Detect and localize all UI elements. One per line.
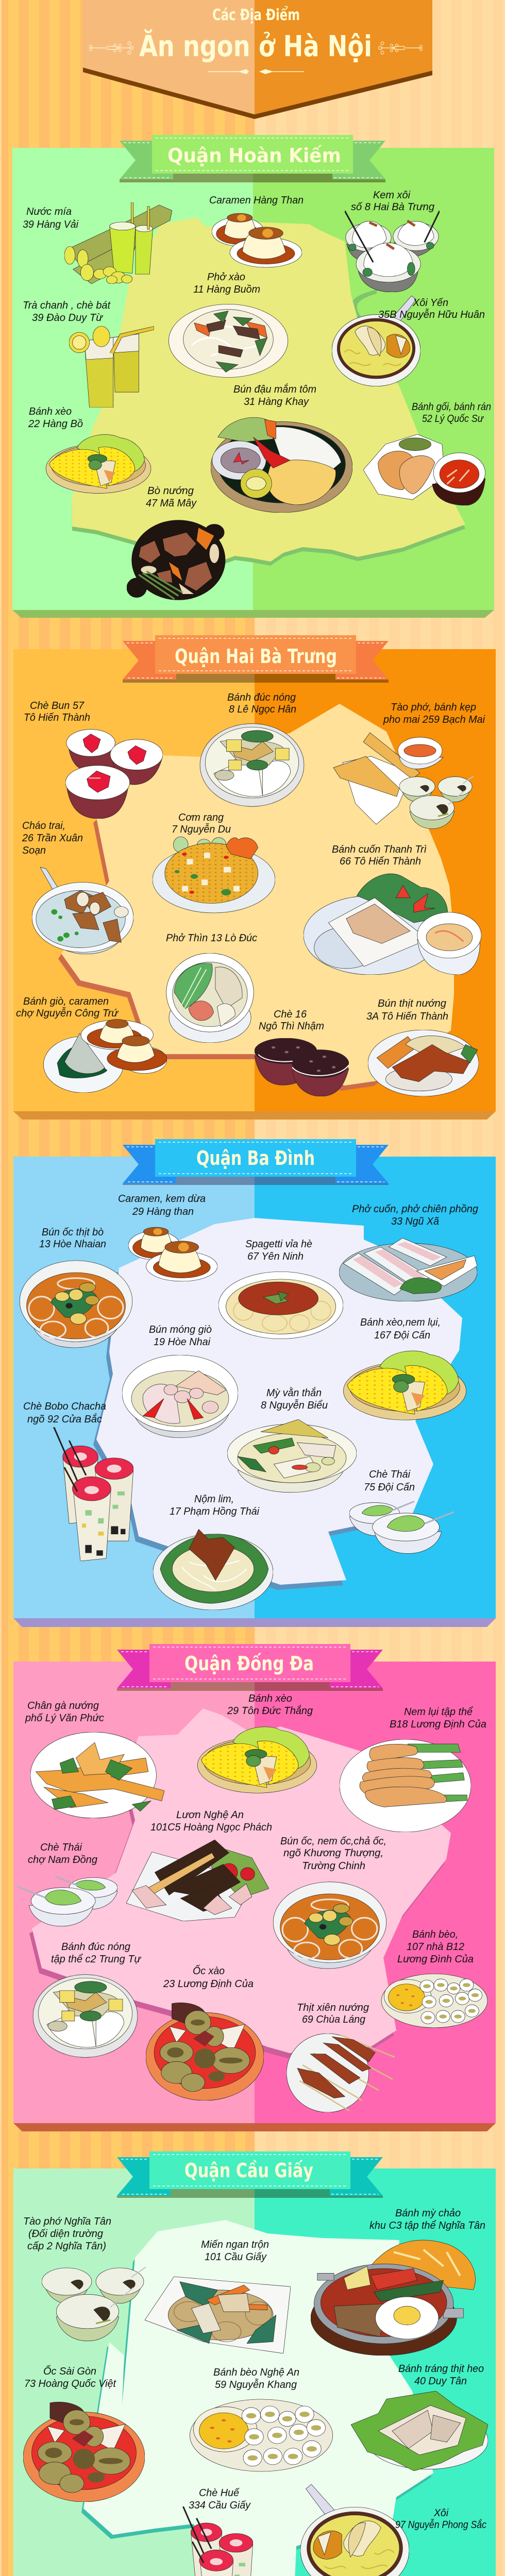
labels: Cầu Giấy: Xôi <box>433 2507 449 2519</box>
dish: nem lụi <box>340 1739 471 1832</box>
dish: xôi yến <box>332 296 420 386</box>
dish: bánh giò, caramen <box>43 1019 167 1093</box>
header banner: Ăn ngon ở Hà Nội <box>139 29 372 63</box>
labels: Ba Đình: 8 Nguyễn Biểu <box>261 1399 328 1411</box>
labels: Hai Bà Trưng: Tào phớ, bánh kẹp <box>391 702 476 713</box>
dish: bún đậu <box>211 417 352 513</box>
dish: bún ốc <box>273 1882 386 1969</box>
labels: Hai Bà Trưng: chợ Nguyễn Công Trứ <box>16 1007 119 1019</box>
labels: Đống Đa: chợ Nam Đồng <box>28 1854 97 1866</box>
header banner <box>83 0 432 119</box>
labels: Đống Đa: Thịt xiên nướng <box>297 2002 369 2013</box>
labels: Ba Đình: Spagetti vỉa hè <box>245 1239 312 1250</box>
labels: Cầu Giấy: 334 Cầu Giấy <box>189 2500 251 2511</box>
labels: Đống Đa: phố Lý Văn Phức <box>25 1713 104 1724</box>
labels: Ba Đình: Chè Bobo Chacha <box>23 1401 106 1412</box>
dish: chè bun <box>65 730 163 819</box>
labels: Hoàn Kiếm <box>23 190 491 509</box>
labels: Hoàn Kiếm: 31 Hàng Khay <box>244 396 309 408</box>
ribbon: Quận Hai Bà Trưng <box>123 635 389 683</box>
dish: bánh bèo <box>381 1974 487 2028</box>
labels: Hai Bà Trưng: 3A Tô Hiến Thành <box>366 1011 448 1022</box>
labels: Đống Đa: 107 nhà B12 <box>407 1941 464 1953</box>
labels: Hai Bà Trưng: Bánh cuốn Thanh Trì <box>332 844 427 855</box>
labels: Đống Đa: Ốc xào <box>193 1964 225 1977</box>
labels: Đống Đa: Lươn Nghệ An <box>176 1809 244 1821</box>
labels: Đống Đa: ngõ Khương Thượng, <box>283 1848 383 1859</box>
dish: chè 16 <box>255 1038 349 1096</box>
labels: Hoàn Kiếm: 47 Mã Mây <box>146 498 197 509</box>
labels: Đống Đa: 23 Lương Định Của <box>163 1978 254 1990</box>
dish: caramen <box>212 213 302 267</box>
dish: caramen, kem dừa <box>128 1227 217 1281</box>
dish: kem xôi <box>345 211 440 292</box>
dish: nộm lim <box>153 1529 273 1610</box>
dish: trà chanh <box>69 326 154 408</box>
labels: Đống Đa: Lương Đình Của <box>397 1954 474 1965</box>
labels: Cầu Giấy: 101 Cầu Giấy <box>205 2251 267 2263</box>
ribbon: Quận Cầu Giấy: Quận Cầu Giấy <box>184 2159 313 2182</box>
panel: Quận Cầu Giấy <box>13 2151 496 2576</box>
labels: Hoàn Kiếm: Bánh xèo <box>29 406 72 417</box>
labels: Ba Đình: 29 Hàng than <box>132 1206 194 1217</box>
labels: Cầu Giấy: Bánh bèo Nghệ An <box>213 2367 299 2378</box>
labels: Hoàn Kiếm: Bún đậu mắm tôm <box>233 383 316 395</box>
labels: Đống Đa: Bánh xèo <box>248 1693 292 1704</box>
panel: Quận Ba Đình <box>13 1139 496 1627</box>
labels: Ba Đình: Bún ốc thịt bò <box>42 1227 104 1238</box>
ribbon: Quận Hoàn Kiếm: Quận Hoàn Kiếm <box>167 144 341 167</box>
dish: bánh bèo nghệ an <box>190 2399 333 2471</box>
dish: lươn nghệ an <box>126 1840 269 1921</box>
labels: Đống Đa: B18 Lương Định Của <box>390 1719 486 1730</box>
labels: Ba Đình: Phở cuốn, phở chiên phồng <box>352 1204 478 1215</box>
ribbon: Quận Cầu Giấy <box>117 2151 383 2198</box>
labels: Đống Đa: Nem lụi tập thể <box>404 1706 473 1718</box>
labels: Ba Đình: 67 Yên Ninh <box>247 1251 304 1262</box>
labels: Ba Đình: 167 Đội Cấn <box>374 1330 430 1341</box>
dish: bánh xèo <box>197 1727 317 1793</box>
dish: bún thịt nướng <box>368 1030 479 1096</box>
dish: bánh gối <box>363 434 485 505</box>
labels: Cầu Giấy: Tào phớ Nghĩa Tân <box>23 2216 111 2227</box>
dish: chè huế <box>183 2506 253 2576</box>
labels: Hoàn Kiếm: số 8 Hai Bà Trưng <box>351 201 434 213</box>
ribbon: Quận Đống Đa: Quận Đống Đa <box>184 1652 314 1675</box>
labels: Hai Bà Trưng: Bánh giò, caramen <box>23 996 109 1007</box>
labels: Ba Đình: Bánh xèo,nem lụi, <box>360 1317 441 1328</box>
labels: Hai Bà Trưng: Ngô Thì Nhậm <box>259 1021 324 1032</box>
labels: Ba Đình: Mỳ vằn thắn <box>266 1387 322 1399</box>
labels: Hoàn Kiếm: 39 Đào Duy Từ <box>32 312 103 324</box>
labels: Cầu Giấy: Bánh tráng thịt heo <box>398 2363 484 2375</box>
labels: Cầu Giấy: 40 Duy Tân <box>414 2376 467 2387</box>
labels: Đống Đa: Bún ốc, nem ốc,chả ốc, <box>280 1836 386 1847</box>
labels: Đống Đa: Trường Chinh <box>302 1860 365 1872</box>
labels: Ba Đình: Bún móng giò <box>149 1324 212 1335</box>
labels: Cầu Giấy: 59 Nguyễn Khang <box>215 2379 297 2391</box>
dish: bánh cuốn <box>304 874 481 975</box>
dish: spagetti <box>218 1272 343 1339</box>
labels: Đống Đa: Chân gà nướng <box>27 1700 99 1711</box>
labels: Cầu Giấy: cấp 2 Nghĩa Tân) <box>27 2241 106 2252</box>
labels: Hoàn Kiếm: Bò nướng <box>147 485 194 497</box>
labels: Cầu Giấy <box>23 2208 486 2531</box>
labels: Hoàn Kiếm: 52 Lý Quốc Sư <box>422 413 484 425</box>
map: Đống Đa <box>29 1708 451 2058</box>
labels: Đống Đa: 69 Chùa Láng <box>302 2014 365 2025</box>
labels: Hoàn Kiếm: Bánh gối, bánh rán <box>412 401 491 413</box>
dish: mỳ vằn thắn <box>227 1419 357 1493</box>
labels: Đống Đa: Chè Thái <box>40 1842 82 1853</box>
dish: miến ngan trộn <box>145 2277 291 2353</box>
labels: Ba Đình: 19 Hòe Nhai <box>154 1336 211 1348</box>
dish: chè bobo chacha <box>54 1427 133 1561</box>
map: Cầu Giấy <box>81 2220 433 2576</box>
labels: Ba Đình: Caramen, kem dừa <box>118 1193 206 1205</box>
dish: ốc xào <box>146 2003 264 2100</box>
labels: Cầu Giấy: khu C3 tập thể Nghĩa Tân <box>369 2220 485 2231</box>
labels: Ba Đình: ngõ 92 Cửa Bắc <box>27 1413 102 1425</box>
labels: Hoàn Kiếm: 35B Nguyễn Hữu Huân <box>378 309 485 320</box>
dish: bún móng giò <box>122 1355 238 1438</box>
dish: bánh đúc nóng <box>200 724 304 806</box>
labels: Hoàn Kiếm: Nước mía <box>26 206 72 217</box>
labels: Hai Bà Trưng: Soạn <box>22 845 46 856</box>
labels: Hai Bà Trưng: 66 Tô Hiến Thành <box>340 856 421 867</box>
labels: Ba Đình: 13 Hòe Nhaian <box>39 1239 106 1250</box>
labels: Cầu Giấy: 73 Hoàng Quốc Việt <box>24 2378 116 2389</box>
labels: Cầu Giấy: Ốc Sài Gòn <box>43 2365 96 2377</box>
labels: Ba Đình: 33 Ngũ Xã <box>391 1216 439 1227</box>
labels: Ba Đình: Chè Thái <box>369 1469 411 1480</box>
labels: Cầu Giấy: Chè Huế <box>199 2487 240 2499</box>
labels: Hai Bà Trưng: 7 Nguyễn Du <box>172 823 231 835</box>
dish: chè thái <box>17 1876 117 1926</box>
dish: phở xào <box>169 304 288 378</box>
dish: bánh tráng thịt heo <box>351 2391 488 2471</box>
ribbon: Quận Đống Đa <box>117 1644 383 1691</box>
dish: phở thìn <box>166 953 254 1043</box>
dish: bò nướng <box>127 520 225 600</box>
labels: Đống Đa: tập thể c2 Trung Tự <box>51 1954 141 1965</box>
dish: phở cuốn <box>339 1238 477 1301</box>
labels: Đống Đa: Bánh bèo, <box>412 1929 458 1940</box>
labels: Hoàn Kiếm: Trà chanh , chè bát <box>23 300 111 311</box>
ribbon: Quận Hoàn Kiếm <box>120 135 385 182</box>
labels: Hai Bà Trưng: Phở Thìn 13 Lò Đúc <box>166 933 257 944</box>
panel: Quận Hai Bà Trưng <box>13 635 496 1120</box>
labels: Hoàn Kiếm: Kem xôi <box>373 190 411 201</box>
dish: chè thái <box>349 1501 454 1553</box>
labels: Đống Đa: Bánh đúc nóng <box>61 1941 130 1953</box>
labels: Ba Đình <box>23 1193 478 1517</box>
labels: Cầu Giấy: Miến ngan trộn <box>201 2239 269 2250</box>
labels: Hoàn Kiếm: Caramen Hàng Than <box>209 195 304 206</box>
labels: Hai Bà Trưng: 8 Lê Ngọc Hân <box>229 704 296 715</box>
labels: Đống Đa <box>25 1693 486 2025</box>
labels: Cầu Giấy: Bánh mỳ chảo <box>395 2208 461 2219</box>
labels: Hoàn Kiếm: 11 Hàng Buồm <box>193 284 260 295</box>
labels: Ba Đình: 75 Đội Cấn <box>364 1482 415 1493</box>
labels: Hai Bà Trưng <box>16 692 485 1032</box>
dish: tào phớ nghĩa tân <box>42 2267 146 2341</box>
panel: Quận Đống Đa <box>13 1644 496 2131</box>
map: Hai Bà Trưng <box>58 704 454 1091</box>
dish: cháo trai <box>32 867 133 954</box>
labels: Hai Bà Trưng: Tô Hiến Thành <box>24 712 90 723</box>
dish: xôi <box>300 2484 409 2576</box>
dish: bún ốc thịt bò <box>20 1261 132 1348</box>
labels: Hoàn Kiếm: Xôi Yến <box>412 297 448 309</box>
map: Ba Đình <box>93 1218 462 1590</box>
map: Hoàn Kiếm <box>72 217 465 566</box>
labels: Hai Bà Trưng: Chè Bun 57 <box>30 700 85 711</box>
dish: bánh đúc nóng <box>33 1975 138 2057</box>
dish: tào phớ, bánh kẹp <box>333 733 474 829</box>
labels: Đống Đa: 101C5 Hoàng Ngọc Phách <box>150 1822 272 1833</box>
labels: Hoàn Kiếm: 22 Hàng Bồ <box>28 418 83 430</box>
labels: Cầu Giấy: 97 Nguyễn Phong Sắc <box>395 2519 486 2531</box>
dish: cơm rang <box>153 837 275 913</box>
labels: Ba Đình: 17 Phạm Hồng Thái <box>170 1506 260 1517</box>
ribbon: Quận Ba Đình <box>123 1139 389 1185</box>
labels: Hai Bà Trưng: Cháo trai, <box>22 820 65 832</box>
panel: Quận Hoàn Kiếm <box>12 135 494 618</box>
dish: bánh xèo <box>46 434 151 494</box>
header banner: Các Địa Điểm <box>212 6 300 24</box>
labels: Cầu Giấy: (Đối diện trường <box>28 2228 103 2240</box>
labels: Đống Đa: 29 Tôn Đức Thắng <box>227 1705 313 1717</box>
dish: bánh mỳ chảo <box>311 2240 476 2355</box>
labels: Hoàn Kiếm: Phở xào <box>207 272 245 283</box>
labels: Hai Bà Trưng: 26 Trần Xuân <box>22 833 83 844</box>
labels: Hai Bà Trưng: Cơm rang <box>178 812 224 823</box>
dish: bánh xèo, nem lụi <box>343 1351 466 1420</box>
dish: chân gà nướng <box>30 1732 164 1818</box>
dish: thịt xiên nướng <box>287 2033 395 2112</box>
labels: Hai Bà Trưng: pho mai 259 Bạch Mai <box>383 714 485 725</box>
labels: Ba Đình: Nộm lim, <box>194 1494 234 1505</box>
dish: nước mía <box>64 202 172 284</box>
ribbon: Quận Hai Bà Trưng: Quận Hai Bà Trưng <box>175 645 337 668</box>
labels: Hai Bà Trưng: Chè 16 <box>274 1009 307 1020</box>
ribbon: Quận Ba Đình: Quận Ba Đình <box>196 1147 315 1170</box>
labels: Hai Bà Trưng: Bánh đúc nóng <box>227 692 296 703</box>
dish: ốc sài gòn <box>23 2402 145 2502</box>
labels: Hoàn Kiếm: 39 Hàng Vải <box>23 219 79 230</box>
labels: Hai Bà Trưng: Bún thịt nướng <box>378 998 446 1009</box>
